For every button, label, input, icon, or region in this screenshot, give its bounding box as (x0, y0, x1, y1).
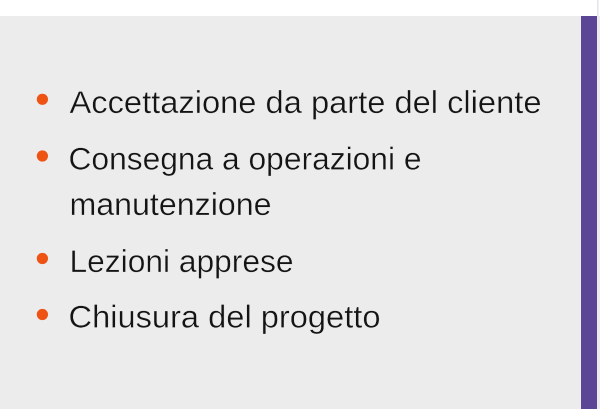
list item: project closure: Chiusura del progetto (68, 298, 380, 334)
list item: customer acceptance: Accettazione da parte del cliente (70, 84, 542, 120)
list item: handover to operations and maintenance (37, 140, 422, 222)
list item: handover to operations and maintenance: manutenzione (70, 186, 272, 222)
list item: handover to operations and maintenance: Consegna a operazioni e (68, 140, 422, 176)
accent bar: purple (581, 16, 597, 409)
bullet list (37, 84, 542, 334)
list item: lessons learned: Lezioni apprese (70, 243, 294, 279)
